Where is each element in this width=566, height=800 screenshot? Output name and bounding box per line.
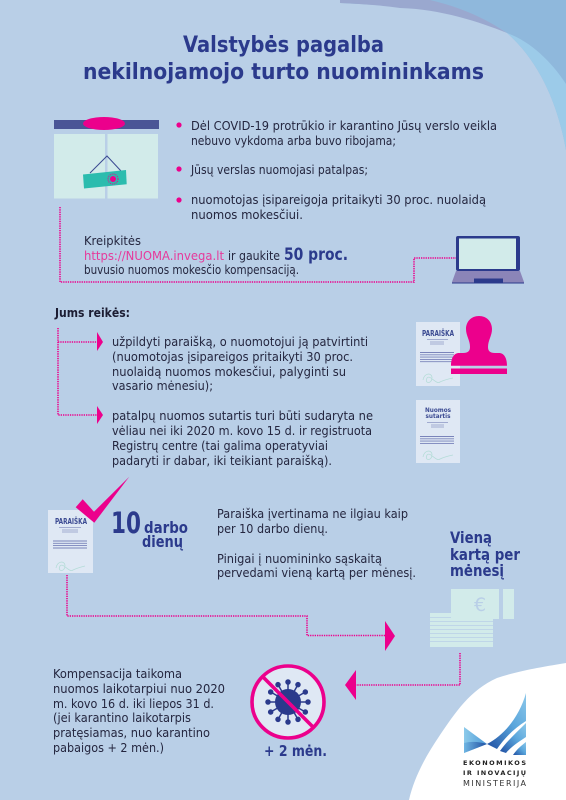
bullet list: eligibility conditions: nebuvo vykdoma arba buvo ribojama; bbox=[191, 133, 396, 148]
icon: stamp bbox=[451, 316, 507, 374]
text block: evaluation and payment timing: per 10 darbo dienų. bbox=[217, 521, 328, 536]
logo: ministry of economy and innovation: IR INOVACIJŲ bbox=[463, 769, 526, 777]
text block: apply and receive compensation: Kreipkitės bbox=[84, 233, 141, 248]
text block: application requirement: vasario mėnesiu); bbox=[112, 378, 213, 393]
text block: compensation period: nuomos laikotarpiui nuo 2020 bbox=[53, 681, 225, 696]
heading: once per month bbox=[450, 528, 520, 580]
icon: application document: PARAIŠKA bbox=[422, 329, 454, 338]
callout: 10 working days: darbo bbox=[144, 518, 188, 537]
icon: laptop bbox=[452, 236, 524, 284]
text block: apply and receive compensation: 50 proc. bbox=[284, 245, 348, 265]
logo: ministry of economy and innovation: MINISTERIJA bbox=[463, 779, 527, 788]
title: nekilnojamojo turto nuomininkams bbox=[83, 60, 484, 85]
icon: crossed out virus bbox=[252, 666, 324, 738]
text block: lease requirement: padaryti ir dabar, iki teikiant paraišką). bbox=[112, 453, 332, 468]
callout: 10 working days: dienų bbox=[142, 532, 183, 551]
bullet list: eligibility conditions: Jūsų verslas nuomojasi patalpas; bbox=[190, 162, 368, 177]
text block: evaluation and payment timing: Pinigai į nuomininko sąskaitą bbox=[217, 551, 382, 566]
logo: ministry of economy and innovation bbox=[463, 693, 527, 788]
heading: once per month: kartą per bbox=[450, 545, 520, 564]
text block: compensation period bbox=[53, 666, 225, 755]
icon: approved application with check mark bbox=[48, 477, 129, 573]
icon: banknotes bbox=[430, 589, 514, 647]
text block: compensation period: (jei karantino laikotarpis bbox=[53, 710, 191, 725]
bullet list: eligibility conditions: Dėl COVID-19 protrūkio ir karantino Jūsų verslo veikla bbox=[191, 118, 497, 133]
text block: apply and receive compensation: buvusio nuomos mokesčio kompensaciją. bbox=[84, 262, 299, 277]
text block: lease requirement: Registrų centre (tai galima operatyviai bbox=[112, 438, 328, 453]
text block: application requirement: nuolaidą nuomos mokesčiui, palyginti su bbox=[112, 364, 346, 379]
label: plus two months: + 2 mėn. bbox=[264, 742, 327, 760]
logo: ministry of economy and innovation: EKONOMIKOS bbox=[463, 759, 526, 767]
text block: compensation period: m. kovo 16 d. iki liepos 31 d. bbox=[53, 696, 214, 711]
icon: lease contract document: sutartis bbox=[426, 412, 451, 420]
icon: approved application with check mark: PARAIŠKA bbox=[55, 515, 88, 526]
text block: apply and receive compensation: ir gaukite bbox=[228, 248, 280, 263]
heading: once per month: Vieną bbox=[450, 528, 492, 547]
text block: lease requirement: patalpų nuomos sutartis turi būti sudaryta ne bbox=[112, 408, 373, 423]
text block: compensation period: pabaigos + 2 mėn.) bbox=[53, 740, 164, 755]
title bbox=[83, 33, 484, 85]
text block: apply and receive compensation: https://NUOMA.invega.lt bbox=[84, 248, 224, 263]
icon: lease contract document bbox=[416, 400, 460, 463]
text block: application requirement: užpildyti paraišką, o nuomotojui ją patvirtinti bbox=[112, 334, 368, 349]
icon: shop window with closed sign bbox=[54, 117, 159, 198]
bullet list: eligibility conditions bbox=[176, 118, 497, 222]
text block: compensation period: pratęsiamas, nuo karantino bbox=[53, 725, 210, 740]
heading: what you need: Jums reikės: bbox=[54, 306, 130, 321]
arrow: dotted connector to banknotes bbox=[67, 575, 395, 651]
arrow: dotted connector to virus icon bbox=[345, 653, 460, 700]
icon: lease contract document: Nuomos bbox=[425, 406, 451, 414]
title: Valstybės pagalba bbox=[183, 33, 384, 58]
callout: 10 working days bbox=[111, 506, 188, 551]
icon: application document bbox=[416, 322, 460, 386]
text block: compensation period: Kompensacija taikoma bbox=[53, 666, 182, 681]
text block: evaluation and payment timing: pervedami vieną kartą per mėnesį. bbox=[217, 565, 416, 580]
text block: application requirement bbox=[112, 334, 368, 393]
icon: banknotes: € bbox=[474, 594, 486, 616]
text block: application requirement: (nuomotojas įsipareigos pritaikyti 30 proc. bbox=[112, 349, 353, 364]
text block: evaluation and payment timing bbox=[217, 506, 416, 580]
text block: lease requirement: vėliau nei iki 2020 m. kovo 15 d. ir registruota bbox=[112, 423, 372, 438]
text block: lease requirement bbox=[112, 408, 373, 468]
bullet list: eligibility conditions: nuomos mokesčiui. bbox=[191, 207, 303, 222]
heading: once per month: mėnesį bbox=[450, 561, 504, 580]
text block: apply and receive compensation bbox=[84, 233, 348, 277]
bullet list: eligibility conditions: nuomotojas įsipareigoja pritaikyti 30 proc. nuolaidą bbox=[191, 192, 486, 207]
callout: 10 working days: 10 bbox=[111, 506, 141, 540]
arrows: dotted branches to requirements bbox=[58, 328, 103, 424]
text block: evaluation and payment timing: Paraiška įvertinama ne ilgiau kaip bbox=[217, 506, 408, 521]
arrow: dotted connector to laptop bbox=[60, 207, 456, 282]
